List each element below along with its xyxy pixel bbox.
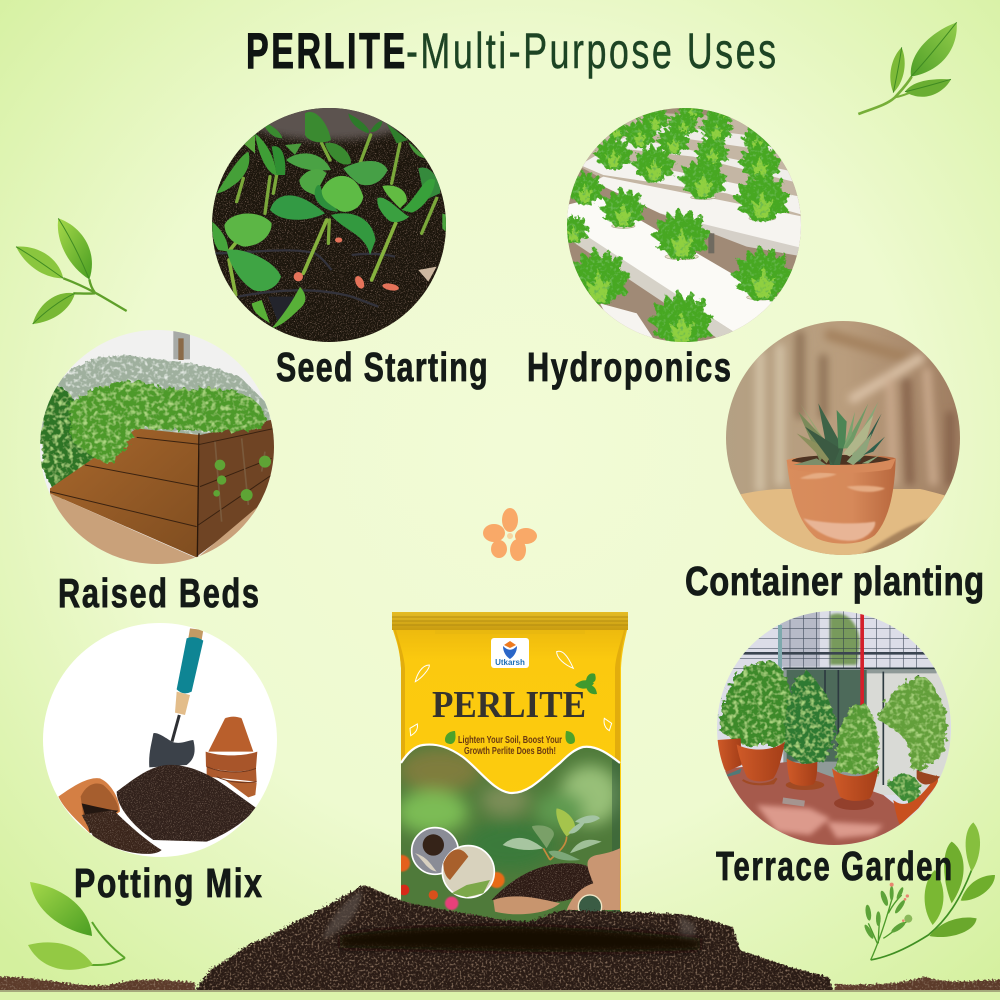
product bag	[392, 612, 628, 930]
logo: Utkarsh: Utkarsh	[495, 658, 525, 667]
photo: raised beds	[40, 330, 274, 564]
label: Container planting: Container planting	[685, 557, 984, 604]
bag tagline: Lighten Your Soil, Boost Your	[458, 735, 562, 746]
icon: leaf sprig	[575, 673, 597, 694]
title: -Multi-Purpose Uses	[406, 24, 776, 79]
bag photo	[401, 746, 620, 923]
icon: leaves top right	[858, 22, 957, 114]
label: Terrace Garden: Terrace Garden	[716, 843, 952, 889]
photo: hydroponics	[567, 108, 801, 342]
photo: potting mix	[43, 623, 277, 857]
label: Raised Beds: Raised Beds	[58, 570, 259, 616]
title: PERLITE	[246, 24, 405, 80]
stacked pots	[206, 717, 257, 797]
foliage	[720, 660, 947, 803]
soil pile	[0, 885, 1000, 1000]
icon: orange flower	[483, 508, 537, 561]
icon: leaves bottom right	[863, 822, 995, 960]
lettuce heads	[557, 98, 792, 345]
photo: seed starting	[212, 108, 446, 342]
photo: terrace garden	[717, 611, 951, 845]
icons: tagline leaves	[445, 731, 575, 744]
title	[246, 24, 776, 80]
bag tagline: Growth Perlite Does Both!	[464, 746, 556, 757]
bag tagline	[458, 735, 562, 757]
label: Potting Mix: Potting Mix	[74, 860, 262, 906]
soil mound	[117, 765, 257, 842]
label: Seed Starting: Seed Starting	[276, 343, 488, 390]
icon: leaves left	[16, 218, 127, 324]
icon: leaves bottom left	[28, 882, 125, 970]
label: Hydroponics: Hydroponics	[527, 344, 731, 390]
bag title: PERLITE	[432, 684, 586, 726]
planters	[717, 738, 940, 825]
photo: container planting	[726, 321, 960, 555]
logo: Utkarsh	[491, 638, 529, 668]
icons: carrot outlines	[410, 651, 612, 736]
